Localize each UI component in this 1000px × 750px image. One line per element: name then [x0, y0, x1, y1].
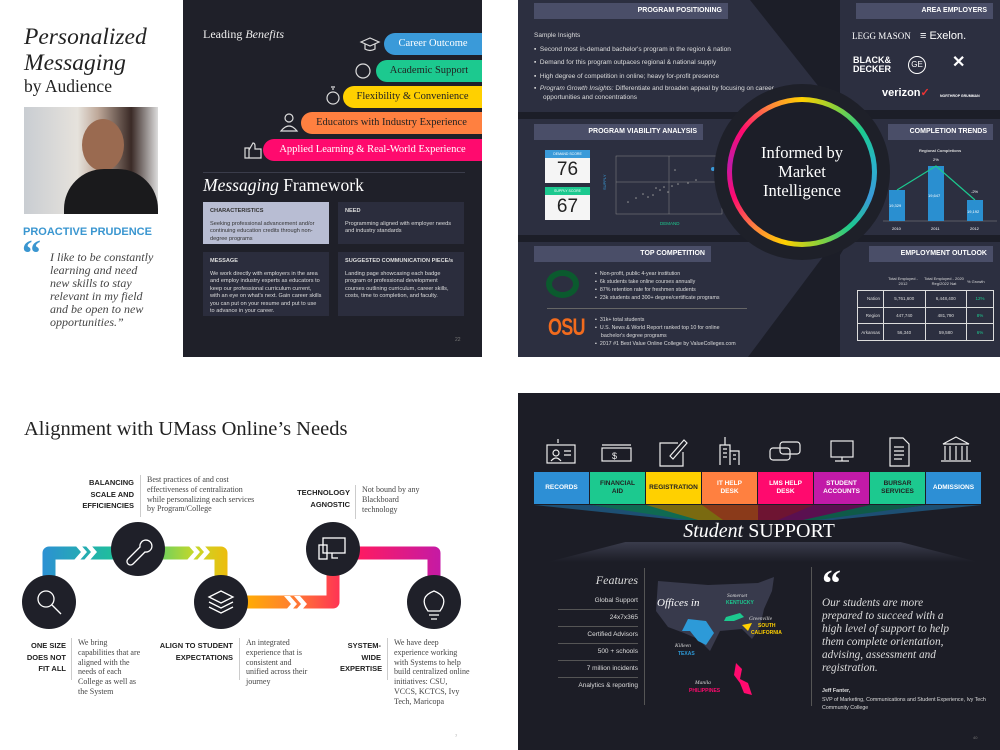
- header: employment outlook: [869, 246, 993, 262]
- competitor 2 bullets: ▪ 2017 #1 Best Value Online College by ValueColleges.com: [595, 341, 736, 347]
- header: completion trends: [888, 124, 993, 140]
- map: offices: SOUTH: [758, 623, 776, 629]
- heading: student support: Student SUPPORT: [683, 520, 835, 542]
- table: employment: 6,448,400: [936, 296, 956, 301]
- box: message: We work directly with employers in the area and employ industry experts as educators to keep our professional curriculum current, with an eye on what's next. Gain career skills you can put on your resume and put to use to advance in your career.: [210, 270, 321, 314]
- quote: I like to be constantly learning and need new skills to stay relevant in my field and be open to new opportunities.”: [50, 250, 153, 329]
- bar chart: regional completions: 19,647: [928, 193, 941, 198]
- map: offices: TEXAS: [678, 651, 695, 657]
- demand score: 76: [557, 159, 578, 180]
- scatter chart: [602, 156, 722, 226]
- step text: system-wide: We have deep experience working with Systems to help build centralized online initiatives: CSU, VCCS, KCTCS, Ivy Tech, Maricopa: [394, 638, 470, 706]
- bar chart: regional completions: -2%: [971, 189, 979, 194]
- employer logos: NORTHROP GRUMMAN: [940, 94, 980, 98]
- bar chart: regional completions: 2010: [892, 226, 902, 231]
- pill: academic support: [376, 60, 482, 82]
- bar chart: regional completions: 2%: [933, 157, 939, 162]
- service icons: $: [612, 451, 617, 461]
- supply score: 67: [557, 196, 578, 217]
- pill: flexibility: Flexibility & Convenience: [356, 91, 468, 102]
- service categories: REGISTRATION: [649, 484, 698, 491]
- testimonial quote: SVP of Marketing, Communications and Student Experience, Ivy Tech Community College: [822, 696, 986, 711]
- box: characteristics: Seeking professional advancement and/or continuing education credits through non-degree programs: [210, 220, 314, 242]
- features list: 500 + schools: [598, 648, 638, 655]
- table: employment: 481,790: [938, 313, 954, 318]
- service categories: BURSAR: [884, 480, 911, 487]
- features list: Analytics & reporting: [578, 682, 638, 689]
- center title: Market: [778, 162, 826, 181]
- bar chart: regional completions: 2011: [931, 226, 940, 231]
- pill: career outcome: [384, 33, 482, 55]
- service categories: ADMISSIONS: [933, 484, 974, 491]
- employer logos: ✕: [952, 54, 965, 71]
- text: sample insights: [534, 32, 774, 101]
- slide 1: personalized messaging: [0, 0, 482, 357]
- title: [24, 24, 147, 96]
- header: area employers: AREA EMPLOYERS: [922, 7, 987, 14]
- step text: balancing scale: BALANCING SCALE AND EFFICIENCIES: [82, 478, 134, 510]
- table: employment: Region: [866, 313, 880, 318]
- slide 3: alignment: [0, 393, 482, 750]
- testimonial quote: Our students are more prepared to succeed with a high level of support to help them complete orientation, advising, assessment and registration.: [822, 597, 949, 674]
- step text: technology agnostic: Not bound by any Blackboard technology: [362, 485, 420, 514]
- competitor 1 bullets: ▪ 23k students and 300+ degree/certificate programs: [595, 295, 720, 301]
- pill: educators: Educators with Industry Experience: [316, 117, 467, 128]
- employer logos: GE: [911, 60, 923, 69]
- text: sample insights: ▪ Second most in-demand bachelor's program in the region & nation: [534, 46, 731, 53]
- slide 4: student support: 40: [973, 735, 977, 740]
- features list: 7 million incidents: [587, 665, 638, 672]
- box: characteristics: [203, 202, 329, 244]
- box: need: Programming aligned with employer needs and industry standards: [345, 220, 451, 234]
- table: employment: [857, 276, 994, 341]
- table: employment: 6%: [977, 330, 983, 335]
- header: top competition: [534, 246, 711, 262]
- header: program viability: [534, 124, 703, 140]
- table: employment: 447,740: [896, 313, 912, 318]
- features list: Certified Advisors: [587, 631, 638, 638]
- map: offices: Manila: [694, 680, 711, 686]
- step text: align to student: An integrated experience that is consistent and unified across their journey: [246, 638, 307, 686]
- service categories: ACCOUNTS: [823, 488, 860, 495]
- divider: [203, 172, 465, 173]
- map: offices: Greenville: [749, 616, 773, 622]
- title: by Audience: [24, 76, 112, 96]
- table: employment: 56,340: [897, 330, 911, 335]
- header: completion trends: COMPLETION TRENDS: [910, 128, 987, 135]
- logo: oregon: [546, 270, 579, 298]
- employer logos: ≡ Exelon.: [920, 30, 966, 42]
- center circle: [714, 84, 890, 260]
- table: employment: 12%: [975, 296, 984, 301]
- dark panel: [183, 0, 482, 357]
- step text: system-wide: [340, 638, 470, 706]
- header: top competition: TOP COMPETITION: [640, 250, 705, 257]
- step text: align to student: [160, 638, 308, 686]
- pill: academic support: Academic Support: [390, 65, 468, 76]
- map: offices: KENTUCKY: [726, 600, 754, 606]
- step text: balancing scale: Best practices of and cost effectiveness of centralization while personalizing each services by Program/College: [147, 475, 254, 513]
- service icons: [546, 436, 971, 467]
- box: characteristics: CHARACTERISTICS: [210, 208, 263, 214]
- header: employment outlook: EMPLOYMENT OUTLOOK: [901, 250, 987, 257]
- header: program positioning: PROGRAM POSITIONING: [638, 7, 722, 14]
- pill: flexibility: [343, 86, 482, 108]
- scatter chart: DEMAND: [660, 221, 680, 226]
- bar chart: regional completions: [883, 148, 997, 231]
- supply score: SUPPLY SCORE: [554, 189, 581, 193]
- service categories: STUDENT: [826, 480, 857, 487]
- text: sample insights: ▪ High degree of competition in online; heavy for-profit presence: [534, 73, 719, 80]
- quote: [22, 233, 154, 329]
- competitor 2 bullets: [595, 317, 736, 347]
- service categories: RECORDS: [545, 484, 578, 491]
- box: communication piece: [338, 252, 464, 316]
- service categories: [534, 472, 981, 504]
- service categories: SERVICES: [881, 488, 914, 495]
- box: need: NEED: [345, 208, 361, 214]
- header: program positioning: [534, 3, 728, 19]
- pill: applied learning: Applied Learning & Real-World Experience: [279, 144, 466, 155]
- text: sample insights: ▪ Demand for this program outpaces regional & national supply: [534, 59, 716, 66]
- demand score: [545, 150, 590, 183]
- map: offices: [656, 577, 782, 695]
- step text: align to student: ALIGN TO STUDENT EXPECTATIONS: [160, 641, 233, 662]
- dark panel: 22: [455, 337, 461, 343]
- photo: [24, 107, 158, 214]
- bar chart: regional completions: 2012: [970, 226, 980, 231]
- logo: OSU: OSU: [548, 314, 585, 341]
- map: offices: PHILIPPINES: [689, 688, 721, 694]
- map: offices: Somerset: [727, 593, 748, 599]
- competitor 2 bullets: bachelor's degree programs: [601, 333, 667, 339]
- leading benefits heading: Leading Benefits: [203, 27, 284, 41]
- bar chart: regional completions: Regional Completions: [919, 148, 962, 153]
- testimonial quote: [821, 563, 986, 711]
- step text: technology agnostic: TECHNOLOGY AGNOSTIC: [297, 488, 350, 508]
- persona heading: PROACTIVE PRUDENCE: [23, 226, 152, 238]
- box: message: [203, 252, 329, 316]
- competitor 1 bullets: ▪ 6k students take online courses annually: [595, 279, 695, 285]
- competitor 1 bullets: ▪ Non-profit, public 4-year institution: [595, 271, 680, 277]
- pill: educators: [301, 112, 482, 134]
- pill: career outcome: Career Outcome: [398, 38, 468, 49]
- service categories: FINANCIAL: [600, 480, 635, 487]
- employer logos: [852, 30, 980, 99]
- box: communication piece: SUGGESTED COMMUNICATION PIECE/s: [345, 258, 453, 264]
- step icons: [22, 522, 461, 629]
- service categories: DESK: [776, 488, 795, 495]
- table: employment: 5,761,600: [894, 296, 914, 301]
- box: need: [338, 202, 464, 244]
- competitor 1 bullets: ▪ 87% retention rate for freshmen students: [595, 287, 696, 293]
- competitor 2 bullets: ▪ 31k+ total students: [595, 317, 644, 323]
- demand score: DEMAND SCORE: [553, 152, 582, 156]
- supply score: [545, 187, 590, 220]
- testimonial quote: “: [822, 563, 841, 605]
- service categories: LMS HELP: [769, 480, 802, 487]
- messaging framework heading: Messaging Framework: [203, 175, 364, 195]
- slide 3: alignment: 7: [455, 733, 457, 738]
- slide 2: market intelligence: [518, 0, 1000, 357]
- text: sample insights: Sample Insights: [534, 32, 580, 39]
- box: message: MESSAGE: [210, 258, 238, 264]
- title: Personalized: [24, 24, 147, 50]
- competitor 2 bullets: ▪ U.S. News & World Report ranked top 10 for online: [595, 325, 720, 331]
- step text: technology agnostic: [297, 485, 420, 519]
- table: employment: % Growth: [967, 279, 985, 284]
- table: employment: 8%: [977, 313, 983, 318]
- employer logos: BLACK&: [853, 55, 891, 65]
- employer logos: LEGG MASON: [852, 31, 911, 41]
- slide 4: student support: [518, 393, 1000, 750]
- bar chart: regional completions: 19,329: [889, 203, 902, 208]
- map: offices: CALIFORNIA: [751, 630, 782, 636]
- testimonial quote: Jeff Fanter,: [822, 688, 850, 694]
- table: employment: Nation: [867, 296, 880, 301]
- step text: system-wide: SYSTEM-WIDE EXPERTISE: [340, 641, 382, 673]
- competitor 1 bullets: [595, 271, 720, 301]
- features list: Global Support: [595, 597, 638, 604]
- features list: 24x7x365: [610, 614, 638, 621]
- box: communication piece: Landing page showcasing each badge program or professional development courses outlining curriculum, career skills, costs, time to completion, and faculty.: [345, 270, 449, 299]
- features list: [558, 573, 638, 689]
- funnel: [534, 505, 982, 520]
- icons: benefits: [244, 37, 380, 159]
- title: Alignment with UMass Online’s Needs: [24, 418, 347, 440]
- step text: balancing scale: [82, 475, 254, 517]
- center title: Informed by: [761, 143, 843, 162]
- service categories: IT HELP: [717, 480, 742, 487]
- service categories: AID: [612, 488, 623, 495]
- employer logos: verizon✓: [882, 87, 930, 99]
- scatter chart: SUPPLY: [602, 174, 607, 190]
- center title: Intelligence: [763, 181, 841, 200]
- bar chart: regional completions: 19,192: [967, 209, 980, 214]
- pill: applied learning: [263, 139, 482, 161]
- table: employment: Total Employed - 2020 Reg/2022 Nat: [924, 276, 964, 286]
- table: employment: Arkansas: [861, 330, 880, 335]
- service categories: DESK: [720, 488, 739, 495]
- step text: one size: [27, 638, 140, 696]
- features list: Features: [596, 573, 638, 587]
- quote: “: [22, 233, 41, 275]
- employer logos: DECKER: [853, 64, 891, 74]
- title: Messaging: [24, 50, 126, 76]
- text: sample insights: ▪ Program Growth Insights: Differentiate and broaden appeal by focusing on career opportunities and concentrations: [534, 85, 774, 101]
- map: offices: Killeen: [674, 643, 691, 649]
- process path: [22, 522, 461, 629]
- map: offices: Offices in: [657, 597, 700, 609]
- table: employment: Total Employed - 2012: [888, 276, 918, 286]
- table: employment: 59,580: [939, 330, 953, 335]
- step text: one size: We bring capabilities that are aligned with the needs of each College as well as the System: [78, 638, 140, 696]
- step text: one size: ONE SIZE DOES NOT FIT ALL: [27, 641, 66, 673]
- header: program viability: PROGRAM VIABILITY ANALYSIS: [588, 128, 697, 135]
- header: area employers: [856, 3, 993, 19]
- center title: [732, 102, 872, 242]
